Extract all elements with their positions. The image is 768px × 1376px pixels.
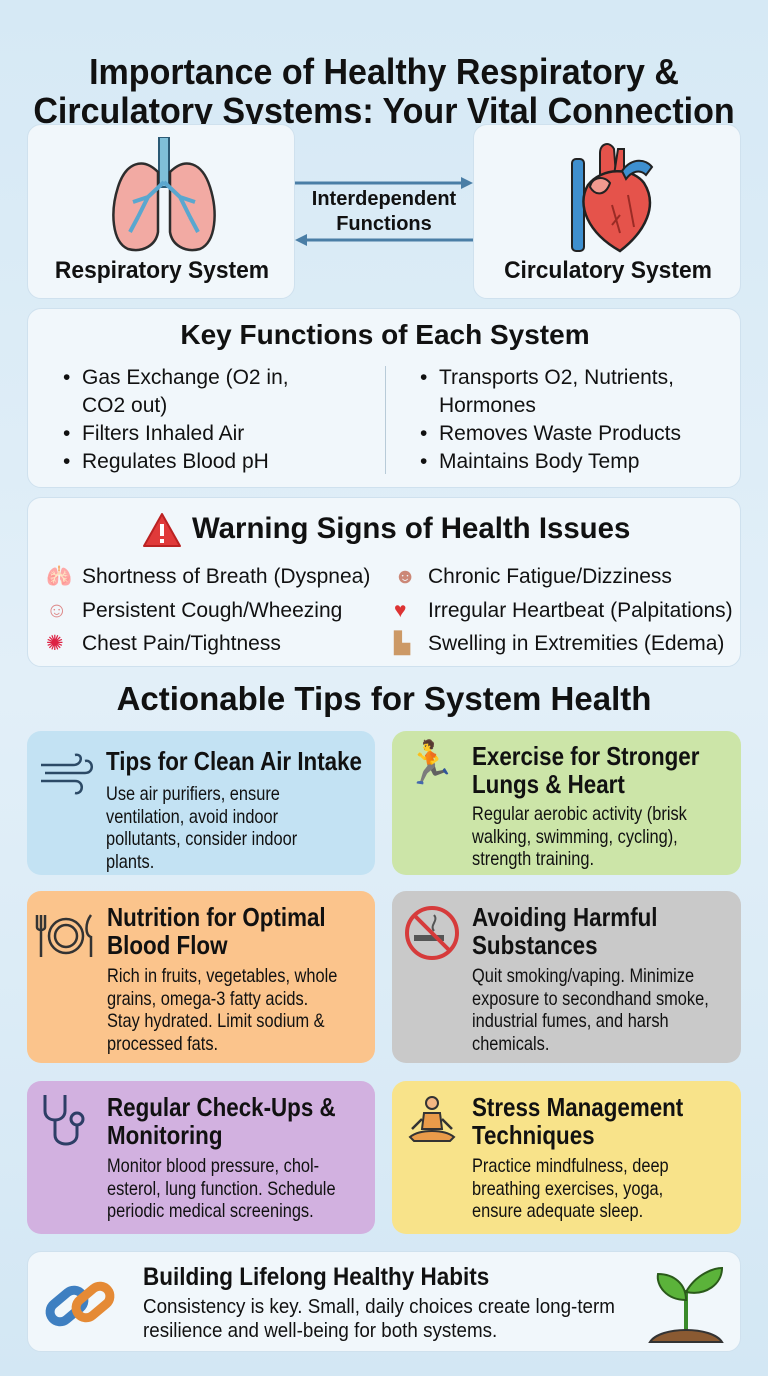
icon: wind [41, 754, 93, 794]
card: avoid harmful: Quit smoking/vaping. Minimize [472, 965, 694, 987]
icon: sprout [648, 1267, 724, 1343]
list: respiratory functions: Regulates Blood pH [82, 450, 269, 473]
card: stress: Stress Management [472, 1092, 683, 1122]
card: exercise: Regular aerobic activity (brisk [472, 803, 687, 825]
card: stress: breathing exercises, yoga, [472, 1178, 663, 1200]
icon: heart [571, 143, 654, 252]
card: clean air [27, 731, 375, 875]
heading: key functions: Key Functions of Each System [180, 319, 590, 350]
card: check-ups: Monitor blood pressure, chol- [107, 1155, 319, 1177]
list: respiratory warnings: ✺ [46, 632, 64, 655]
list: respiratory warnings: ☺ [46, 599, 67, 622]
list: respiratory warnings: 🫁 [46, 565, 72, 588]
list: respiratory warnings: Persistent Cough/Wheezing [82, 599, 342, 622]
panel: respiratory system [27, 124, 295, 299]
icon: meditation [408, 1096, 456, 1142]
arrow label [312, 188, 456, 235]
list: circulatory warnings: Swelling in Extremities (Edema) [428, 632, 724, 655]
card: exercise: Lungs & Heart [472, 769, 625, 799]
panel: key functions: • [420, 366, 427, 389]
list: circulatory functions [420, 366, 681, 473]
list: respiratory functions: Filters Inhaled Air [82, 422, 244, 445]
arrow label: Interdependent [312, 188, 456, 210]
label: respiratory: Respiratory System [55, 257, 269, 284]
panel: key functions: • [420, 450, 427, 473]
icon: no smoking [405, 906, 459, 960]
heading: warning signs: Warning Signs of Health Issues [192, 512, 630, 545]
card: exercise [392, 731, 741, 875]
list: circulatory warnings: Irregular Heartbeat (Palpitations) [428, 599, 733, 622]
list: circulatory warnings [394, 565, 733, 656]
icon: runner: 🏃 [404, 739, 456, 786]
icon: chain [46, 1282, 114, 1326]
card: stress: Practice mindfulness, deep [472, 1155, 669, 1177]
panel: lifelong habits: Building Lifelong Healthy Habits [143, 1263, 489, 1291]
list: circulatory warnings: ☻ [394, 565, 416, 588]
card: nutrition: Nutrition for Optimal [107, 902, 326, 932]
title [33, 51, 735, 131]
card: avoid harmful: Avoiding Harmful [472, 902, 658, 932]
card: nutrition: Stay hydrated. Limit sodium & [107, 1010, 325, 1032]
card: stress [392, 1081, 741, 1234]
icon: stethoscope [44, 1095, 84, 1146]
panel: lifelong habits: resilience and well-being for both systems. [143, 1320, 497, 1342]
panel: lifelong habits [27, 1251, 741, 1352]
list: circulatory functions: Hormones [439, 394, 536, 417]
card: nutrition: Blood Flow [107, 930, 227, 960]
card: avoid harmful [392, 891, 741, 1063]
list: circulatory warnings: ♥ [394, 599, 406, 622]
card: check-ups: periodic medical screenings. [107, 1200, 314, 1222]
label: circulatory: Circulatory System [504, 257, 712, 284]
list: respiratory warnings: Shortness of Breath (Dyspnea) [82, 565, 370, 588]
list: circulatory functions: Transports O2, Nutrients, [439, 366, 674, 389]
card: nutrition [27, 891, 375, 1063]
card: check-ups: esterol, lung function. Schedule [107, 1178, 336, 1200]
panel: key functions: • [63, 450, 70, 473]
panel: circulatory system [473, 124, 741, 299]
panel: key functions [27, 308, 741, 488]
icon: warning [143, 513, 181, 547]
title: Circulatory Systems: Your Vital Connection [33, 90, 735, 131]
list: circulatory warnings: Chronic Fatigue/Dizziness [428, 565, 672, 588]
list: respiratory warnings [46, 565, 370, 655]
title: Importance of Healthy Respiratory & [89, 51, 679, 92]
card: check-ups [27, 1081, 375, 1234]
list: circulatory functions: Maintains Body Temp [439, 450, 639, 473]
card: avoid harmful: exposure to secondhand smoke, [472, 988, 709, 1010]
icon: lungs [112, 137, 216, 252]
card: avoid harmful: Substances [472, 930, 598, 960]
arrow label: Functions [336, 213, 432, 235]
card: clean air: pollutants, consider indoor [106, 828, 297, 850]
arrow: right [295, 177, 473, 189]
card: exercise: Exercise for Stronger [472, 741, 699, 771]
arrow: left [295, 234, 473, 246]
list: respiratory functions: Gas Exchange (O2 in, [82, 366, 289, 389]
card: nutrition: Rich in fruits, vegetables, whole [107, 965, 337, 987]
panel: warning signs [27, 497, 741, 667]
list: circulatory functions: Removes Waste Products [439, 422, 681, 445]
card: check-ups: Regular Check-Ups & [107, 1092, 336, 1122]
heading: actionable tips: Actionable Tips for System Health [117, 680, 651, 717]
card: nutrition: processed fats. [107, 1032, 218, 1054]
card: avoid harmful: chemicals. [472, 1032, 549, 1054]
card: clean air: plants. [106, 850, 154, 872]
card: check-ups: Monitoring [107, 1120, 222, 1150]
card: nutrition: grains, omega-3 fatty acids. [107, 988, 308, 1010]
list: respiratory functions: CO2 out) [82, 394, 167, 417]
panel: lifelong habits: Consistency is key. Small, daily choices create long-term [143, 1296, 615, 1318]
card: avoid harmful: industrial fumes, and harsh [472, 1010, 669, 1032]
card: clean air: ventilation, avoid indoor [106, 806, 278, 828]
card: exercise: walking, swimming, cycling), [472, 826, 678, 848]
card: clean air: Use air purifiers, ensure [106, 783, 280, 805]
list: circulatory warnings: ▙ [394, 632, 410, 655]
card: clean air: Tips for Clean Air Intake [106, 746, 362, 776]
card: stress: ensure adequate sleep. [472, 1200, 643, 1222]
list: respiratory warnings: Chest Pain/Tightness [82, 632, 281, 655]
card: stress: Techniques [472, 1120, 595, 1150]
icon: plate [36, 914, 92, 957]
panel: key functions: • [63, 366, 70, 389]
panel: key functions: • [420, 422, 427, 445]
list: respiratory functions [63, 366, 289, 473]
panel: key functions: • [63, 422, 70, 445]
card: exercise: strength training. [472, 848, 594, 870]
